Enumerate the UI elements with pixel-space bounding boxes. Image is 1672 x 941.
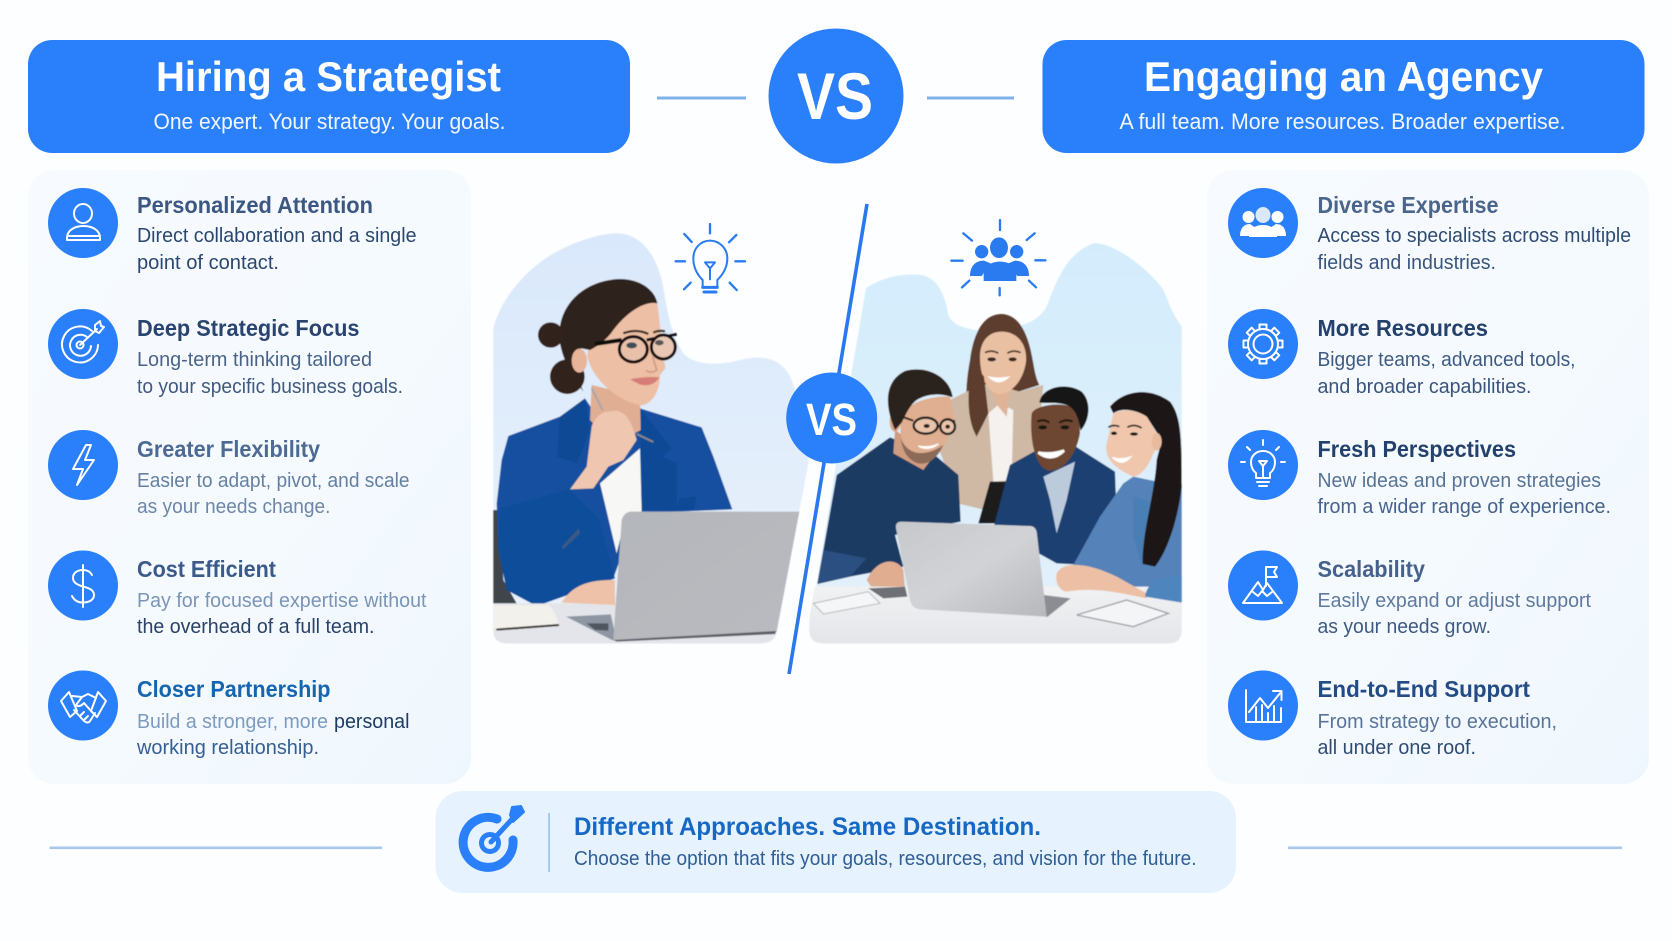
man with glasses [817,437,961,584]
item: greater flexibility: Easier to adapt, pivot, and scale [137,470,410,492]
header: hiring a strategist: Hiring a Strategist [156,53,501,100]
item: personalized attention: Personalized Attention [137,192,373,218]
icon: person [67,204,100,240]
item: closer partnership: personal [334,711,410,733]
item: personalized attention [48,188,416,274]
item: greater flexibility: as your needs change. [137,496,330,518]
item: deep strategic focus [48,309,403,398]
item: end-to-end support [1228,670,1557,759]
icon: mountain flag [1243,567,1282,603]
panel: strategist benefits [28,170,471,784]
item: greater flexibility [48,430,410,518]
item: scalability: Easily expand or adjust support [1318,590,1591,612]
item: end-to-end support: From strategy to execution, [1318,711,1557,733]
item: cost efficient: the overhead of a full team. [137,616,374,638]
item: diverse expertise [1228,188,1631,274]
header: hiring a strategist: One expert. Your strategy. Your goals. [154,109,506,134]
icon: growth chart [1246,690,1282,722]
item: more resources: Bigger teams, advanced tools, [1318,349,1576,371]
item: closer partnership: Build a stronger, more [137,711,328,733]
icon: team [1240,207,1286,237]
woman with long hair [1073,477,1182,602]
diagonal divider [789,204,867,674]
item: diverse expertise: Diverse Expertise [1318,192,1498,218]
top VS badge: VS [797,59,873,133]
item: deep strategic focus: to your specific business goals. [137,376,403,398]
footer callout [436,791,1236,893]
icon: lightning bolt [73,445,94,485]
top VS badge [768,28,904,164]
header: engaging an agency: A full team. More resources. Broader expertise. [1120,109,1566,134]
item: diverse expertise: Access to specialists across multiple [1318,225,1631,247]
footer callout: Different Approaches. Same Destination. [574,813,1041,841]
icon: target [62,321,104,362]
item: closer partnership [48,670,410,759]
item: cost efficient: Cost Efficient [137,556,276,582]
item: greater flexibility: Greater Flexibility [137,436,320,462]
item: scalability: Scalability [1318,556,1425,582]
item: more resources: and broader capabilities. [1318,376,1532,398]
item: more resources: More Resources [1318,315,1488,341]
panel: agency benefits [1207,170,1649,784]
item: cost efficient: Pay for focused expertise without [137,590,427,612]
item: fresh perspectives: New ideas and proven strategies [1318,470,1601,492]
item: fresh perspectives: from a wider range of experience. [1318,496,1611,518]
header: engaging an agency: Engaging an Agency [1144,53,1544,100]
icon: target with arrow [463,806,524,867]
item: personalized attention: Direct collaboration and a single [137,225,416,247]
header: hiring a strategist [28,40,630,153]
center VS badge: VS [806,394,857,445]
man in suit [993,445,1118,567]
icon: lightbulb above strategist [676,224,745,292]
item: more resources [1228,309,1576,398]
center VS badge [786,372,877,464]
item: diverse expertise: fields and industries. [1318,252,1496,274]
item: closer partnership: Closer Partnership [137,676,330,702]
item: scalability [1228,550,1591,638]
item: fresh perspectives [1228,430,1611,518]
item: fresh perspectives: Fresh Perspectives [1318,436,1516,462]
woman standing [966,314,1039,437]
item: deep strategic focus: Deep Strategic Focus [137,315,360,341]
icon: lightbulb [1241,440,1285,486]
item: end-to-end support: End-to-End Support [1318,676,1530,702]
item: end-to-end support: all under one roof. [1318,737,1476,759]
photo: agency team at laptop [809,243,1182,643]
header: engaging an agency [1042,40,1644,153]
item: personalized attention: point of contact. [137,252,279,274]
icon: gear [1244,324,1282,364]
photo: strategist woman at laptop [493,233,808,643]
item: deep strategic focus: Long-term thinking tailored [137,349,372,371]
icon: team above agency [951,220,1045,295]
item: scalability: as your needs grow. [1318,616,1491,638]
item: closer partnership: working relationship. [136,737,319,759]
icon: dollar sign [72,565,94,607]
icon: handshake [61,692,106,722]
item: cost efficient [48,550,427,638]
footer callout: Choose the option that fits your goals, resources, and vision for the future. [574,847,1196,870]
